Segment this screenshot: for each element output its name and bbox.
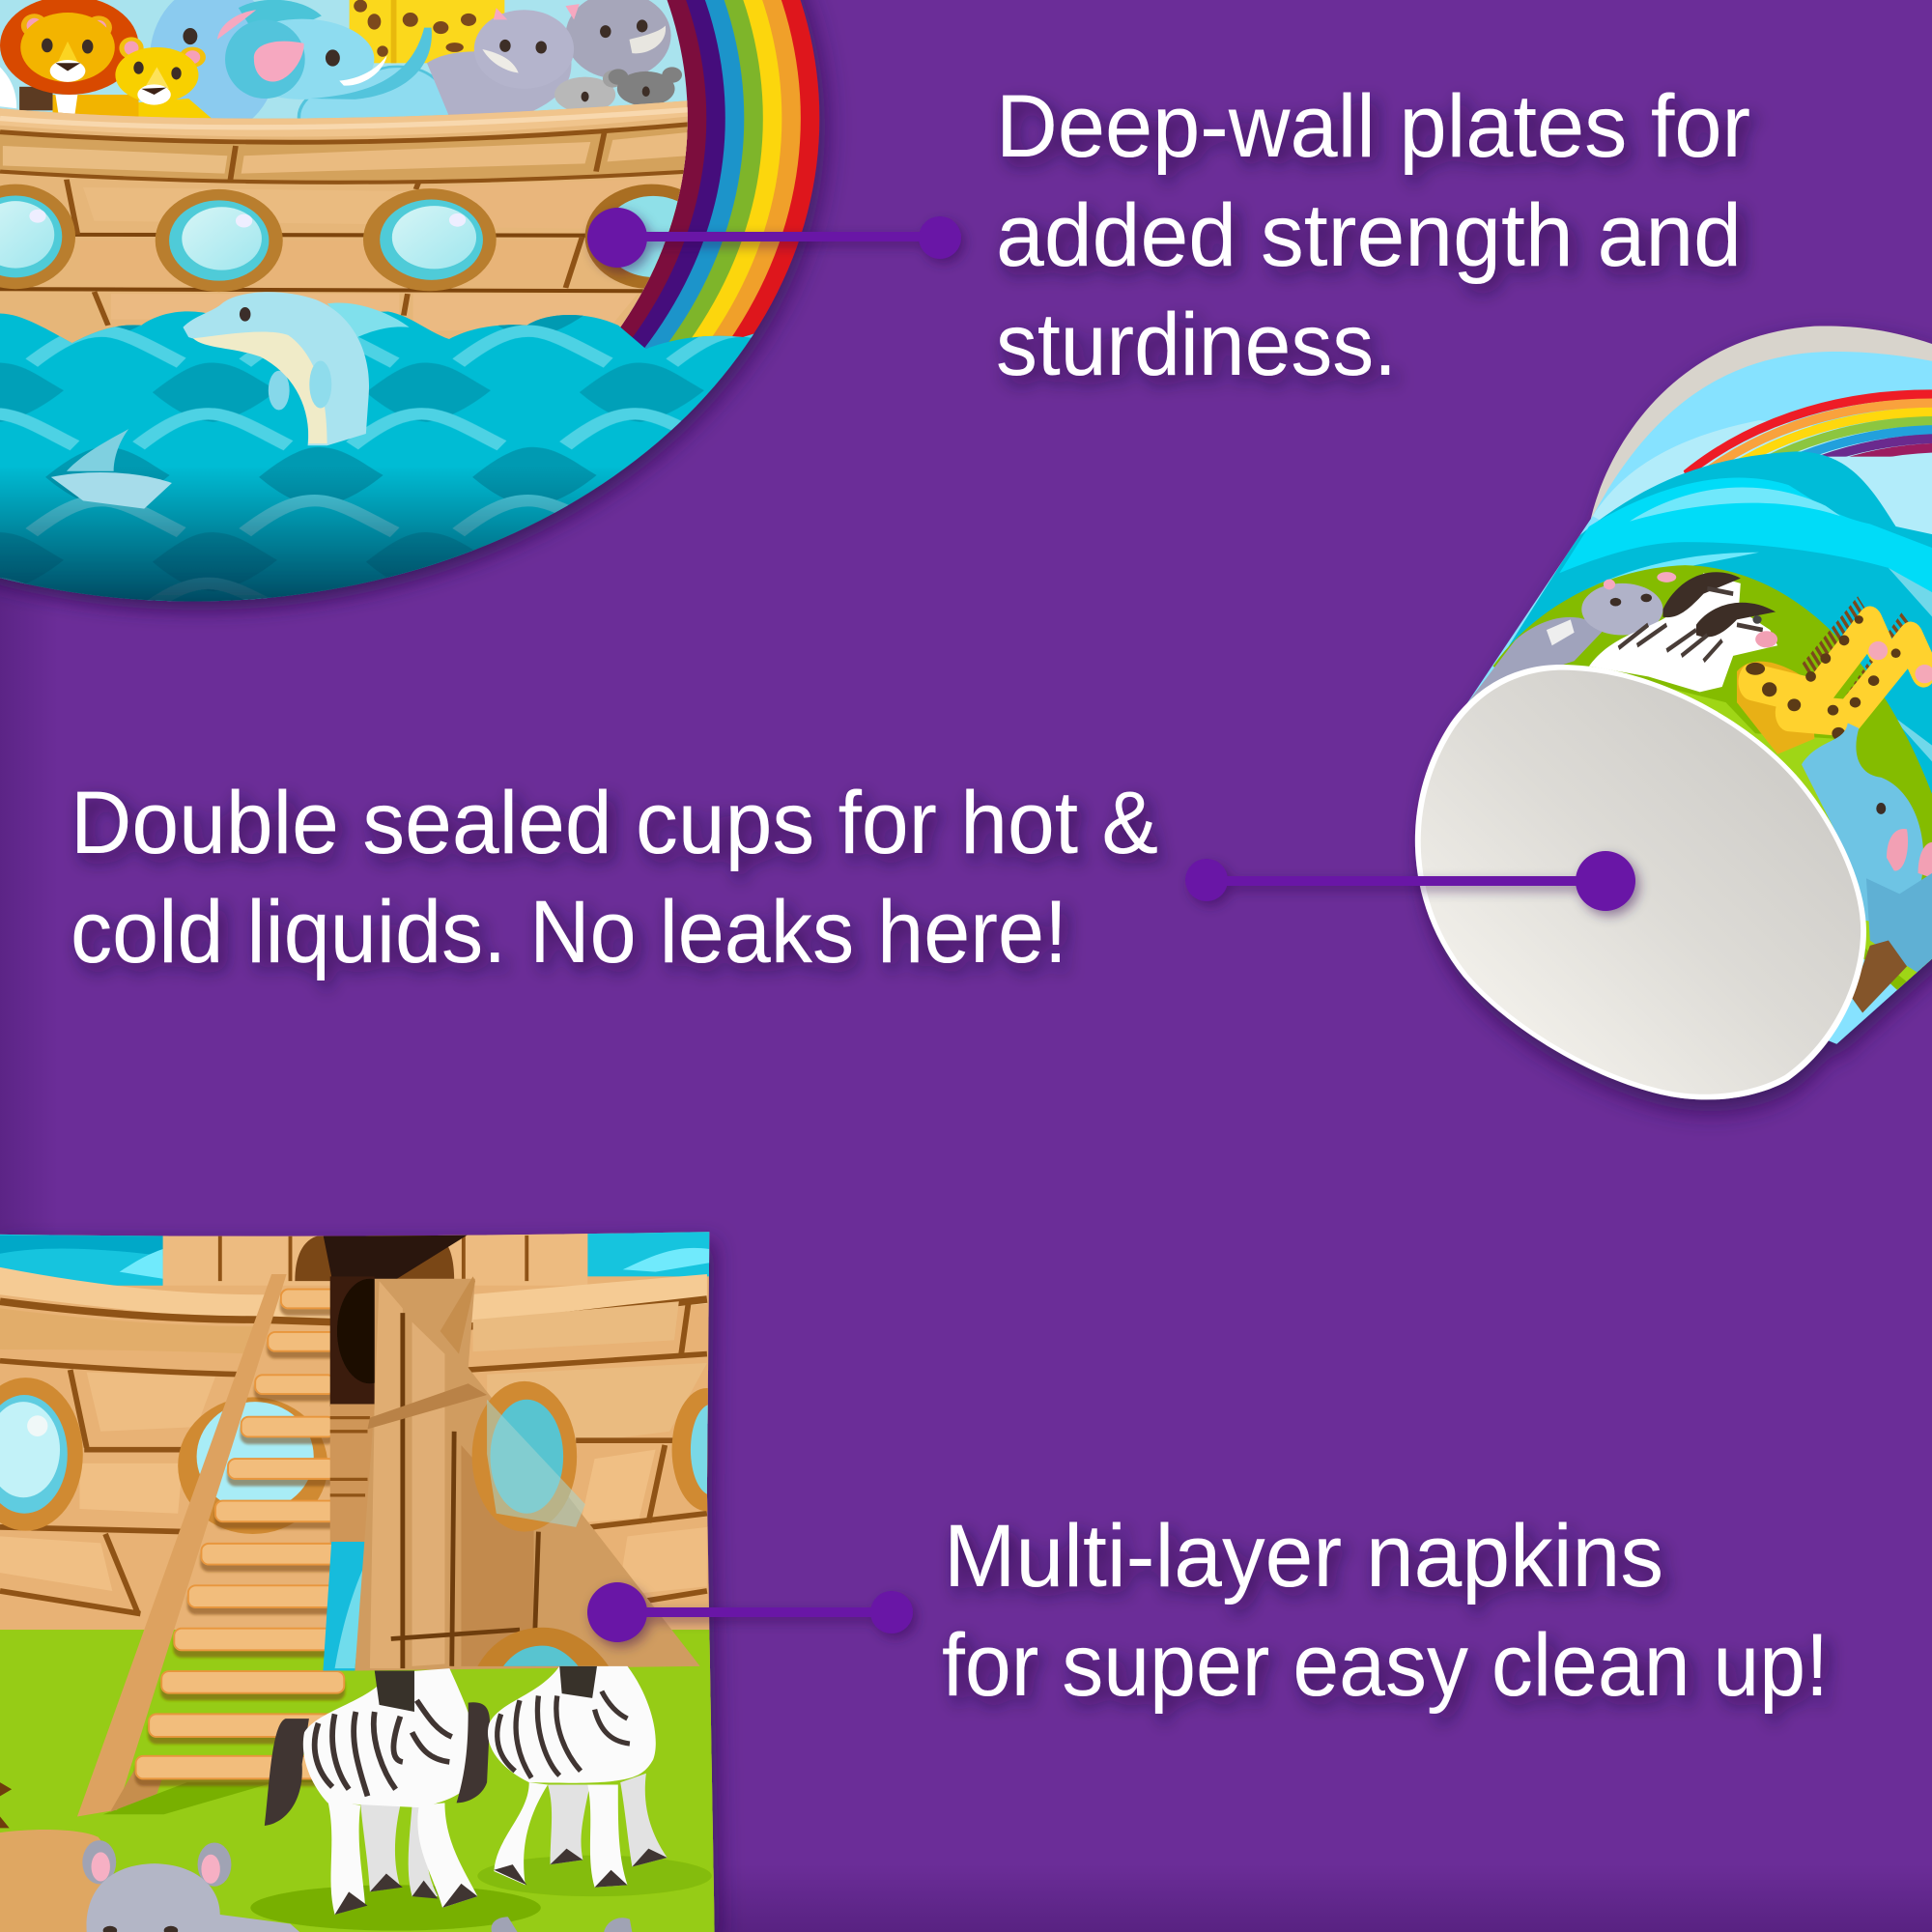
text: plates callout: Deep-wall plates for (996, 77, 1750, 176)
cup animal: zebras (1589, 572, 1777, 692)
connector: napkin (587, 1582, 913, 1642)
cup rainbow (1683, 389, 1932, 473)
text: plates callout (996, 77, 1750, 394)
napkin porthole behind ladder (178, 1397, 327, 1534)
cup: tipped paper cup with sealed base (1415, 327, 1932, 1099)
napkin zebra right (457, 1666, 668, 1888)
cup waves (1508, 451, 1932, 794)
animal: giraffes (350, 0, 504, 63)
plate: Noah's ark paper plate (0, 0, 832, 631)
waves (0, 311, 765, 611)
napkin hull (0, 1267, 707, 1618)
animal: lion (0, 0, 139, 118)
cup animal: hippos (1468, 572, 1677, 701)
animal: back elephant (151, 0, 322, 118)
text: napkins callout: for super easy clean up! (942, 1616, 1829, 1715)
second dolphin (51, 429, 172, 509)
text: cups callout (71, 774, 1158, 981)
napkin sky corners (0, 1231, 712, 1286)
napkin: folded Noah's ark napkin (0, 1231, 742, 1932)
napkin zebra left (265, 1668, 477, 1915)
napkin porthole left (0, 1378, 83, 1531)
ark hull (0, 100, 691, 355)
text: napkins callout (942, 1507, 1829, 1715)
cup base (1415, 665, 1866, 1099)
text: cups callout: cold liquids. No leaks here! (71, 883, 1067, 981)
animal: lion cub (115, 37, 215, 122)
text: napkins callout: Multi-layer napkins (944, 1507, 1663, 1605)
cup rim (1591, 327, 1932, 519)
animal: rhinos (427, 0, 671, 116)
cup animal: giraffes (1737, 604, 1932, 754)
napkin fold (323, 1276, 700, 1671)
animal: front elephant (225, 19, 450, 123)
napkin ark tower (163, 1231, 587, 1286)
text: plates callout: added strength and (996, 186, 1742, 285)
text: plates callout: sturdiness. (996, 296, 1397, 394)
text: cups callout: Double sealed cups for hot & (71, 774, 1158, 872)
napkin porthole right (672, 1388, 742, 1511)
connector: cup (1185, 851, 1635, 911)
cup animal: elephants (1802, 724, 1932, 1013)
porthole centre-right (363, 188, 497, 291)
napkin hippos and bear (0, 1782, 632, 1932)
cup body artwork (1427, 335, 1932, 1060)
cup green hill (1492, 565, 1932, 1034)
porthole centre-left (156, 189, 283, 292)
napkin grass (0, 1630, 717, 1932)
porthole left (0, 185, 75, 289)
connector: plate (587, 208, 961, 268)
napkin ladder (77, 1274, 344, 1817)
ark and animals (0, 0, 718, 355)
dolphin (183, 292, 410, 445)
animal: koalas (554, 67, 682, 112)
porthole right (585, 184, 680, 289)
plate rainbow rim (0, 0, 819, 602)
